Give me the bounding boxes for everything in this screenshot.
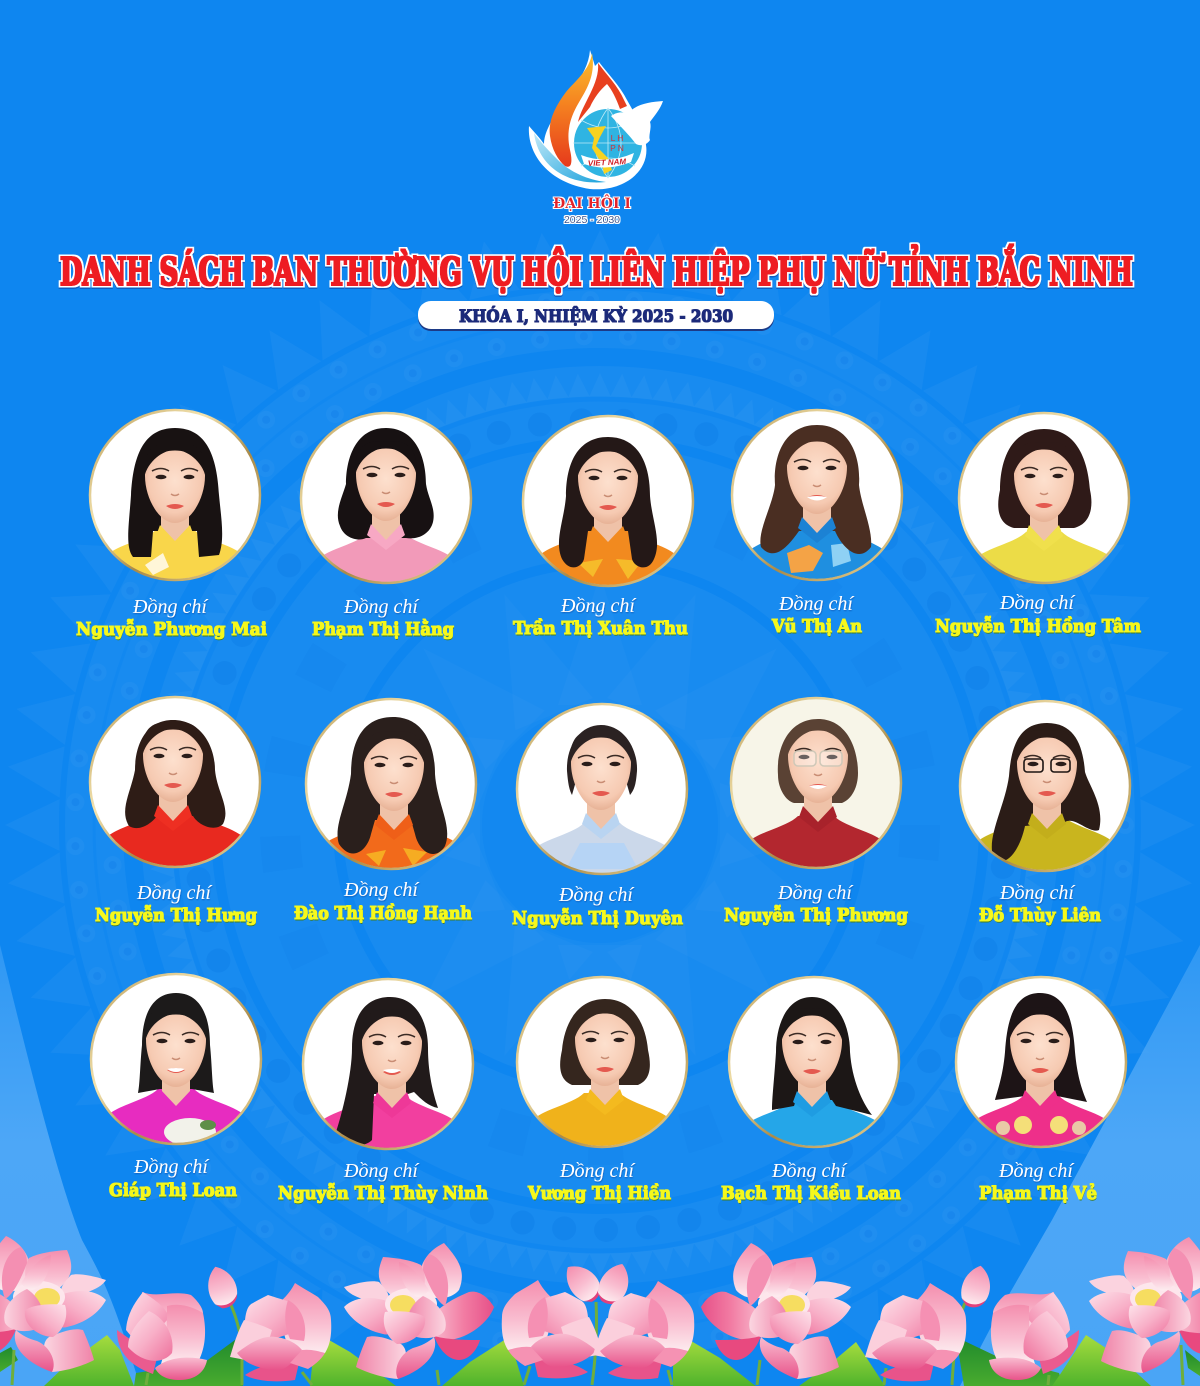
logo: white outline (529, 50, 646, 189)
caption: Đồng chí (778, 593, 855, 615)
caption: Đồng chí (343, 596, 420, 618)
logo: globe meridians (573, 108, 643, 178)
name: Phạm Thị Hằng (312, 618, 454, 640)
portrait (730, 408, 904, 582)
name: Nguyễn Thị Thùy Ninh (278, 1182, 488, 1204)
lotus: half open 4 (593, 1281, 694, 1379)
member: Nguyễn Thị Hồng Tâm (935, 413, 1141, 637)
member: Nguyễn Thị Phương (721, 698, 911, 926)
logo: LHPN text second row: PN (610, 143, 626, 153)
portrait (516, 702, 688, 876)
logo: globe (573, 108, 643, 178)
caption: Đồng chí (998, 1160, 1075, 1182)
portrait (958, 412, 1130, 584)
portrait (300, 412, 472, 584)
logo: Đại hội I (529, 50, 663, 226)
member: Vũ Thị An (722, 410, 912, 637)
member: Đào Thị Hồng Hạnh (294, 699, 486, 924)
caption: Đồng chí (558, 884, 635, 906)
name: Nguyễn Thị Hưng (95, 904, 257, 926)
logo: red flame (578, 63, 627, 122)
corner light panel: left (0, 945, 140, 1386)
caption: Đồng chí (999, 592, 1076, 614)
lotus: center-left open flower (344, 1243, 494, 1379)
member: Phạm Thị Hằng (291, 413, 481, 640)
member: Nguyễn Phương Mai (76, 410, 270, 640)
lotus garden (0, 1236, 1200, 1386)
member: Đỗ Thùy Liên (950, 701, 1140, 926)
logo: Vietnam map (587, 126, 612, 174)
logo: banner text: VIET NAM (588, 157, 627, 168)
lotus leaves (0, 1335, 1200, 1386)
portrait (304, 698, 478, 870)
corner light panel: right (960, 945, 1200, 1386)
name: Vương Thị Hiền (527, 1182, 671, 1204)
name: Đào Thị Hồng Hạnh (294, 902, 472, 924)
lotus bud 4 (957, 1262, 995, 1311)
name: Nguyễn Phương Mai (76, 618, 267, 640)
member: Vương Thị Hiền (507, 977, 697, 1204)
member: Phạm Thị Vẻ (946, 977, 1136, 1204)
caption: Đồng chí (559, 1160, 636, 1182)
member: Bạch Thị Kiều Loan (719, 977, 909, 1204)
lotus bud 3 (593, 1259, 636, 1309)
member: Giáp Thị Loan (81, 974, 271, 1201)
caption: Đồng chí (343, 879, 420, 901)
caption: Đồng chí (343, 1160, 420, 1182)
logo: LHPN text: LH (611, 133, 625, 143)
portrait (516, 976, 688, 1148)
lotus bud 2 (558, 1257, 607, 1308)
logo: congress text: ĐẠI HỘI I (553, 195, 631, 212)
caption: Đồng chí (771, 1160, 848, 1182)
logo: years text: 2025 - 2030 (564, 214, 620, 226)
member: Nguyễn Thị Thùy Ninh (278, 979, 488, 1204)
name: Nguyễn Thị Hồng Tâm (935, 615, 1141, 637)
logo: blue wave (534, 133, 606, 182)
lotus stems (12, 1302, 1183, 1385)
name: Đỗ Thùy Liên (979, 904, 1101, 926)
lotus: half open 3 (502, 1280, 603, 1378)
portrait (958, 700, 1132, 872)
member: Nguyễn Thị Hưng (80, 697, 270, 926)
name: Nguyễn Thị Duyên (512, 907, 683, 929)
lotus: half open 5 (865, 1283, 966, 1381)
portrait (730, 696, 902, 870)
portrait (522, 414, 694, 588)
portrait (88, 696, 262, 868)
name: Trần Thị Xuân Thu (513, 617, 688, 639)
lotus: far left open flower (0, 1236, 106, 1372)
lotus: far right open flower (1089, 1237, 1200, 1373)
portrait (954, 976, 1128, 1148)
logo: dove (611, 101, 663, 145)
lotus: half open 6 (989, 1292, 1079, 1380)
portrait (728, 976, 900, 1148)
subtitle pill (418, 301, 774, 331)
logo: banner (581, 153, 634, 168)
member: Trần Thị Xuân Thu (513, 416, 703, 639)
caption: Đồng chí (777, 882, 854, 904)
lotus: center-right open flower (701, 1243, 851, 1379)
lotus bud 1 (203, 1263, 241, 1311)
name: Phạm Thị Vẻ (979, 1182, 1097, 1204)
portrait (302, 978, 474, 1150)
name: Giáp Thị Loan (109, 1180, 237, 1201)
name: Vũ Thị An (771, 616, 862, 637)
portrait (88, 408, 262, 582)
subtitle text: KHÓA I, NHIỆM KỲ 2025 - 2030 (459, 306, 733, 327)
logo: orange flame (550, 53, 593, 167)
caption: Đồng chí (136, 882, 213, 904)
caption: Đồng chí (133, 1156, 210, 1178)
lotus: half open 1 (117, 1292, 207, 1380)
caption: Đồng chí (999, 882, 1076, 904)
portrait (90, 972, 262, 1146)
lotus: half open 2 (230, 1283, 331, 1381)
member: Nguyễn Thị Duyên (507, 704, 697, 929)
caption: Đồng chí (560, 595, 637, 617)
name: Bạch Thị Kiều Loan (721, 1182, 901, 1204)
caption: Đồng chí (132, 596, 209, 618)
name: Nguyễn Thị Phương (724, 904, 908, 926)
